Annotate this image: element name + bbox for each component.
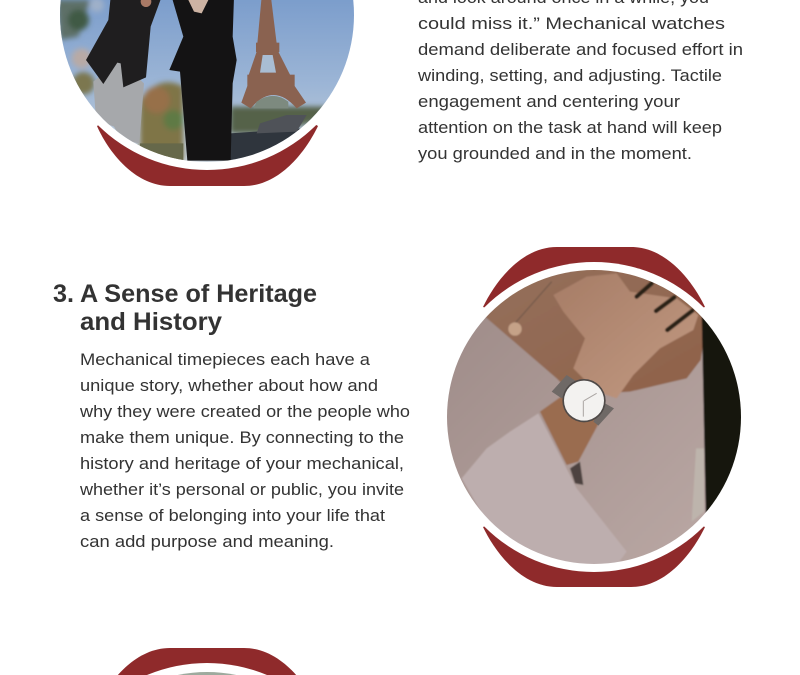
trees left [57, 0, 330, 160]
finger shadows [637, 283, 692, 330]
section 3: body text: whether it’s personal or public, you invite [79, 480, 404, 499]
section 3: body text: why they were created or the people who [79, 402, 410, 421]
ground [140, 143, 184, 160]
section 3: body text: can add purpose and meaning. [80, 532, 334, 551]
section 2: body text: you grounded and in the moment. [418, 144, 692, 163]
section 3: body text: make them unique. By connecting to the [80, 428, 404, 447]
section 3: heading: and History [80, 308, 222, 336]
white ring [439, 262, 749, 572]
photo top [60, 672, 354, 675]
section 3: heading [53, 280, 317, 336]
red frame, bottom [483, 480, 705, 587]
bare skin [485, 265, 707, 395]
section 2: body text: engagement and centering your [418, 92, 680, 111]
section 3: body text: history and heritage of your mechanical, [80, 454, 404, 473]
hand [553, 273, 698, 398]
white ring [52, 0, 362, 170]
red crescent frame, bottom [97, 60, 318, 186]
section 3: body text [79, 350, 410, 551]
red frame, top [96, 648, 318, 675]
section 4: photo with red frame (cropped at the bottom edge) [51, 648, 363, 675]
left figure trousers [93, 62, 144, 143]
Eiffel Tower [241, 0, 306, 108]
forearm [540, 397, 598, 466]
white ring [51, 663, 363, 675]
section 2: body text: winding, setting, and adjusting. Tactile [417, 66, 722, 85]
section 2: body text: could miss it.” Mechanical watches [418, 14, 725, 33]
left figure jacket [86, 0, 162, 87]
hands [188, 0, 208, 13]
section 2: body text: demand deliberate and focused effort in [418, 40, 743, 59]
section 3: body text: Mechanical timepieces each have a [80, 350, 371, 369]
watch [552, 375, 614, 426]
section 3: body text: unique story, whether about how and [80, 376, 378, 395]
section 2: photo with red frame [52, 0, 362, 186]
necklace [515, 282, 552, 323]
photo: two women in front of the Eiffel Tower [57, 0, 357, 167]
section 3: body text: a sense of belonging into your life that [80, 506, 385, 525]
section 3: photo with red frame [439, 247, 749, 587]
photo: wrist wearing a watch [440, 265, 747, 572]
section 2: body text [417, 0, 743, 163]
sleeve [462, 413, 627, 565]
section 3: heading: 3. A Sense of Heritage [53, 280, 317, 308]
right figure black outfit [169, 0, 237, 161]
red frame, top [483, 247, 705, 340]
section 2: body text: attention on the task at hand will keep [418, 118, 722, 137]
dark panel [700, 316, 741, 514]
